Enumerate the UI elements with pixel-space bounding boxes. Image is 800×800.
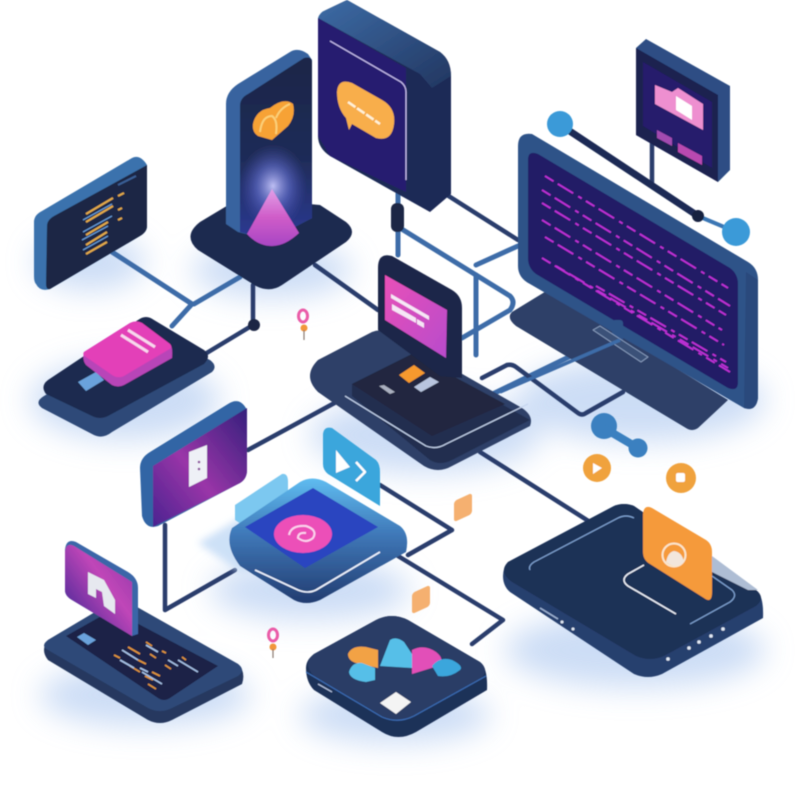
orange key <box>399 365 425 383</box>
device: right router with orange tile <box>503 504 763 677</box>
code lines <box>82 176 136 254</box>
knob right <box>722 218 750 246</box>
keyboard plate <box>352 354 505 436</box>
laptop screen <box>65 541 138 636</box>
laptop screen <box>378 255 462 378</box>
cable node <box>248 319 260 331</box>
device: tall chat panel <box>318 0 451 212</box>
icon: blue dumbbell <box>591 413 648 458</box>
grey keys <box>414 377 439 392</box>
connector cables light <box>112 190 612 405</box>
pink block <box>83 322 172 386</box>
icon: orange play coin <box>583 454 611 482</box>
white chip <box>380 692 411 714</box>
cable over monitor base <box>500 340 620 392</box>
device: left pink module <box>38 317 215 437</box>
port line <box>318 684 332 692</box>
light halo <box>239 144 307 228</box>
icon: heart <box>253 101 294 140</box>
code keys <box>114 642 198 689</box>
tower base <box>190 198 352 289</box>
icon: folder <box>655 85 703 130</box>
device: center laptop <box>310 255 531 470</box>
cone <box>247 189 299 246</box>
tile shadow strip <box>712 556 758 590</box>
keypad keys <box>77 633 96 645</box>
icon: orange stop coin <box>666 463 696 493</box>
knob middle <box>692 210 704 222</box>
device: bottom left laptop <box>44 541 243 723</box>
connector cables dark <box>165 140 652 644</box>
icon: white card <box>189 445 207 487</box>
icon: map pin upper <box>298 310 308 340</box>
monitor stand <box>510 290 728 430</box>
icon: small orange tag lower <box>412 585 430 614</box>
white trace <box>624 565 676 614</box>
small tiles <box>678 143 702 165</box>
terminal code lines <box>542 176 730 372</box>
stand neck <box>612 320 623 344</box>
pad body <box>229 478 407 603</box>
device: large monitor <box>510 134 758 430</box>
device: bottom hub with blobs <box>306 616 487 737</box>
pink spiral badge <box>274 515 332 553</box>
icon: small orange tag <box>454 493 472 522</box>
port dots <box>540 608 725 661</box>
device: purple wall monitor <box>140 401 247 527</box>
white edge line <box>255 552 380 592</box>
blob shapes <box>348 647 378 668</box>
panel top band <box>318 0 451 88</box>
device: left top monitor <box>34 157 147 290</box>
icon: map pin lower <box>268 629 278 658</box>
device: center glowing pad <box>198 428 407 603</box>
orange tile <box>643 507 712 600</box>
slider bar with knobs <box>547 111 750 246</box>
cable connector node <box>391 203 404 232</box>
blue arrow tile <box>323 428 380 506</box>
soft glow panel <box>198 518 300 572</box>
stand plate <box>593 326 648 362</box>
device: phone tower with cone <box>190 50 352 289</box>
laptop base <box>310 330 531 470</box>
blue screen <box>245 488 378 568</box>
device: top right small monitor <box>636 39 730 182</box>
icon: speech bubble <box>337 82 394 139</box>
soft blue floor shadows <box>30 234 765 743</box>
knob left <box>547 111 573 137</box>
back tile <box>235 474 288 530</box>
monitor frame <box>518 134 758 409</box>
screen text lines <box>391 294 429 320</box>
screen outline <box>530 516 735 624</box>
tower body <box>226 50 312 240</box>
